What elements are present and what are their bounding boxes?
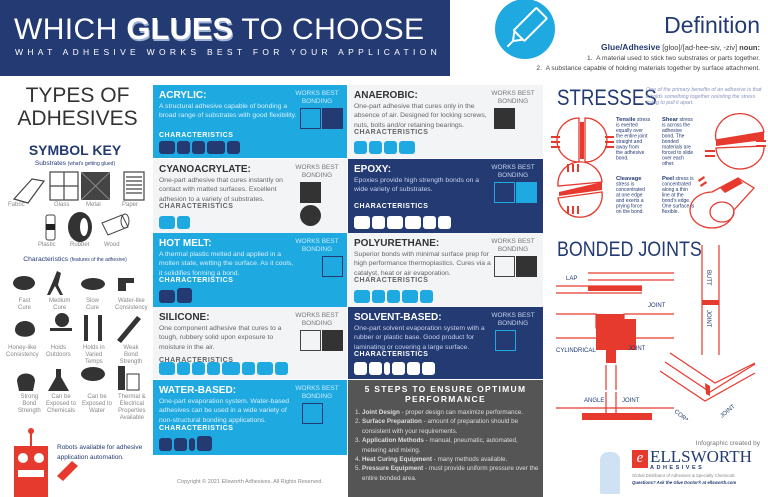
joint diagrams: JOINT	[622, 398, 640, 404]
characteristic icons grid: Honey-like	[8, 345, 37, 351]
logo: ellsworth	[632, 450, 648, 468]
heading: types of adhesives: ADHESIVES	[17, 107, 138, 130]
card: solvent-based: WORKS BEST BONDING	[491, 312, 535, 327]
substrate icons: Rubber	[70, 242, 90, 248]
card: polyurethane	[348, 233, 543, 307]
definition block: Glue/Adhesive [gloo]/[ad-hee-siv, -ziv] noun:	[601, 42, 760, 52]
stress diagrams: away from	[616, 144, 639, 150]
robot caption: Robots available for adhesive	[57, 444, 142, 451]
stress diagrams: One surface is	[662, 204, 695, 210]
card: hot melt: HOT MELT:	[159, 238, 212, 249]
card: epoxy: Epoxies provide high strength bonds on a wide variety of substrates.	[354, 177, 479, 193]
stress diagrams: bonded	[662, 139, 679, 145]
joint diagrams: CYLINDRICAL	[556, 348, 596, 354]
stress diagrams: equally over	[616, 128, 643, 134]
characteristic icons grid: Varied	[85, 352, 102, 358]
credit: infographic created by: Infographic created by	[696, 440, 760, 447]
credit: infographic created by	[600, 440, 760, 494]
characteristic icons grid: Thermal &	[118, 394, 146, 400]
characteristic icons grid: Cure	[86, 305, 99, 311]
card: silicone: WORKS BEST BONDING	[295, 312, 339, 327]
definition block	[536, 12, 760, 72]
stress diagrams: Shear stress	[662, 117, 693, 123]
joint diagrams: BUTT	[705, 270, 711, 286]
stress diagrams: prying force	[616, 204, 642, 210]
characteristic icons grid: Consistency	[6, 352, 39, 358]
stress diagrams: Tensile stress	[616, 117, 651, 123]
substrate icons: Glass	[54, 202, 69, 208]
card: water-based: WATER-BASED:	[159, 385, 236, 396]
stress diagrams	[551, 113, 766, 229]
panel: 5 steps	[348, 380, 543, 497]
stress diagrams: the entire joint	[616, 134, 648, 140]
characteristic icons grid: Cure	[18, 305, 31, 311]
card: anaerobic: ANAEROBIC:	[354, 90, 418, 101]
card: polyurethane: POLYURETHANE:	[354, 238, 439, 249]
heading: symbol key: SYMBOL KEY	[29, 142, 121, 158]
credit: infographic created by: ELLSWORTH	[650, 447, 752, 466]
joint diagrams: JOINT	[648, 303, 666, 309]
characteristic icons grid: Exposed to	[46, 401, 76, 407]
card: polyurethane: WORKS BEST BONDING	[491, 238, 535, 253]
substrate icons: Wood	[104, 242, 120, 248]
characteristic icons grid: Cure	[53, 305, 66, 311]
card: acrylic: A structural adhesive capable of bonding a broad range of substrates with good flexibility.	[159, 103, 296, 119]
card: cyanoacrylate: CYANOACRYLATE:	[159, 164, 251, 175]
characteristic icons grid: Fast	[19, 298, 30, 304]
heading: bonded joints: BONDED JOINTS	[557, 238, 702, 261]
characteristics label: Characteristics (features of the adhesive)	[23, 256, 127, 263]
card: hot melt: CHARACTERISTICS	[159, 277, 233, 284]
substrate icons: Metal	[86, 202, 101, 208]
characteristic icons grid: Outdoors	[46, 352, 71, 358]
characteristic icons grid: Slow	[86, 298, 99, 304]
card: epoxy: WORKS BEST BONDING	[491, 164, 535, 179]
characteristic icons grid: Consistency	[115, 305, 148, 311]
card: epoxy: CHARACTERISTICS	[354, 203, 428, 210]
stress diagrams: flexible.	[662, 209, 679, 215]
card: hot melt	[153, 233, 347, 307]
panel: 5 steps: Joint Design - proper design can maximize performance.	[362, 409, 523, 416]
card: epoxy: EPOXY:	[354, 164, 391, 175]
subtitle: WHAT ADHESIVE WORKS BEST FOR YOUR APPLICATION	[15, 47, 441, 57]
definition block: 1. A material used to stick two substrates or parts together.	[587, 55, 760, 62]
characteristic icons grid: Strength	[120, 359, 142, 365]
card: polyurethane: Superior bonds with minimal surface prep for high performance thermoplastics. Cures via a catalyst, heat or air evaporation.	[354, 251, 491, 277]
stress diagrams: at one edge	[616, 192, 643, 198]
joint diagrams: LAP	[566, 276, 577, 282]
stress diagrams: concentrated	[616, 187, 645, 193]
card: cyanoacrylate: One-part adhesive that cures instantly on contact with matted surfaces. Excellent adhesion to a variety of substrates.	[159, 177, 283, 203]
stress diagrams: adhesive	[662, 128, 682, 134]
stresses intro: One of the primary benefits of an adhesive is that it holds something together resisting the stress trying to pull it apart.	[646, 87, 761, 106]
substrate icons: Fabric	[8, 202, 25, 208]
card: hot melt: A thermal plastic melted and applied in a molten state, wetting the surface. As it cools, it solidifies forming a bond.	[159, 251, 293, 277]
characteristic icons grid: Holds	[51, 345, 66, 351]
title: WHICH GLUES TO CHOOSE	[14, 11, 424, 46]
stress diagrams: bond. The	[662, 134, 685, 140]
card: solvent-based	[348, 307, 543, 379]
stress diagrams: line at the	[662, 192, 684, 198]
stress diagrams: over each	[662, 156, 684, 162]
card: anaerobic: WORKS BEST BONDING	[491, 90, 535, 105]
panel: 5 steps: PERFORMANCE	[405, 394, 486, 404]
substrate icons	[8, 171, 145, 248]
card: cyanoacrylate: WORKS BEST BONDING	[295, 164, 339, 179]
heading: types of adhesives: TYPES OF	[26, 84, 129, 107]
joint diagrams: ANGLE	[584, 398, 604, 404]
card: water-based: WORKS BEST BONDING	[295, 385, 339, 400]
characteristic icons grid: Can be	[51, 394, 71, 400]
definition block: 2. A substance capable of holding materials together by surface attachment.	[536, 65, 760, 72]
characteristic icons grid: Weak Bond	[123, 345, 139, 358]
characteristic icons grid: Temps	[85, 359, 103, 365]
card: anaerobic	[348, 85, 543, 158]
characteristic icons grid: Properties	[118, 408, 146, 414]
characteristic icons grid: Water	[89, 408, 105, 414]
definition block: Definition	[664, 12, 760, 38]
icon: glue doctor	[600, 452, 620, 494]
credit: infographic created by: Questions? Ask the Glue Doctor® at ellsworth.com	[632, 480, 736, 485]
stress diagrams: Cleavage	[616, 176, 642, 182]
joint diagrams: JOINT	[628, 346, 646, 352]
robot caption: application automation.	[57, 454, 124, 461]
icon: robot	[14, 428, 78, 497]
characteristic icons grid: Strong	[20, 394, 38, 400]
substrate icons: Plastic	[38, 242, 56, 248]
header banner	[0, 0, 450, 76]
card: silicone: One component adhesive that cures to a tough, rubbery solid upon exposure to moisture in the air.	[159, 325, 281, 351]
panel: 5 steps: Surface Preparation - amount of preparation should be consistent with your requirements.	[362, 418, 518, 435]
stress diagrams: the adhesive	[616, 150, 645, 156]
card: anaerobic: One-part adhesive that cures only in the absence of air. Designed for locking screws, nuts, bolts and/or retaining bearings.	[354, 103, 487, 129]
heading: stresses: STRESSES	[557, 85, 657, 110]
characteristic icons grid: Can be	[87, 394, 107, 400]
stress diagrams: forced to slide	[662, 150, 693, 156]
panel: 5 steps: Pressure Equipment - must provide uniform pressure over the entire bonded area.	[362, 465, 538, 482]
characteristic icons grid: Water-like	[118, 298, 145, 304]
stress diagrams: is exerted	[616, 122, 638, 128]
characteristic icons grid: Exposed to	[82, 401, 112, 407]
card: cyanoacrylate: CHARACTERISTICS	[159, 203, 233, 210]
stress diagrams: stress is	[616, 182, 635, 188]
card: epoxy	[348, 159, 543, 233]
card: acrylic: WORKS BEST BONDING	[295, 90, 339, 105]
card: solvent-based: One-part solvent evaporation system with a rubber or plastic base. Good product for laminating or covering a large surface.	[354, 325, 485, 351]
copyright: Copyright © 2021 Ellsworth Adhesives. All Rights Reserved.	[177, 479, 323, 485]
credit: infographic created by: ADHESIVES	[650, 465, 704, 471]
credit: infographic created by: Global Distributor of Adhesives & Specialty Chemicals	[632, 473, 735, 478]
card: acrylic: ACRYLIC:	[159, 90, 206, 101]
card: solvent-based: CHARACTERISTICS	[354, 351, 428, 358]
card: water-based: One-part evaporation system. Water-based adhesives can be used in a wide variety of non-structural bonding applications.	[159, 398, 289, 424]
characteristic icons grid: Bond	[22, 401, 36, 407]
characteristic icons grid: Electrical	[120, 401, 144, 407]
card: hot melt: WORKS BEST BONDING	[295, 238, 339, 253]
stress diagrams: on the bond.	[616, 209, 644, 215]
card: cyanoacrylate	[153, 159, 347, 233]
card: silicone: SILICONE:	[159, 312, 210, 323]
card: water-based: CHARACTERISTICS	[159, 425, 233, 432]
stress diagrams: is across the	[662, 122, 690, 128]
stress diagrams: other.	[662, 161, 675, 167]
joint diagrams: JOINT	[705, 310, 711, 328]
substrates label: Substrates (what's getting glued)	[35, 160, 115, 167]
panel: 5 steps: 5 STEPS TO ENSURE OPTIMUM	[365, 384, 526, 394]
card: anaerobic: CHARACTERISTICS	[354, 129, 428, 136]
card: acrylic	[153, 85, 347, 158]
heading: types of adhesives	[17, 84, 138, 130]
card: acrylic: CHARACTERISTICS	[159, 132, 233, 139]
stress diagrams: bond.	[616, 156, 629, 162]
card: silicone: CHARACTERISTICS	[159, 357, 233, 364]
characteristic icons grid: Chemicals	[47, 408, 75, 414]
panel: 5 steps: Application Methods - manual, pneumatic, automated, metering and mixing.	[362, 437, 518, 454]
characteristic icons grid: Available	[120, 415, 144, 421]
icon: glue tube	[495, 0, 555, 59]
characteristic icons grid: Medium	[49, 298, 70, 304]
stress diagrams: along a thin	[662, 187, 688, 193]
card: polyurethane: CHARACTERISTICS	[354, 277, 428, 284]
substrate icons: Paper	[122, 202, 138, 208]
stress diagrams: materials are	[662, 144, 691, 150]
characteristic icons grid: Strength	[18, 408, 41, 414]
card: silicone	[153, 307, 347, 379]
stress diagrams: concentrated	[662, 182, 691, 188]
joint diagrams	[556, 245, 756, 420]
joint diagrams: JOINT	[719, 404, 737, 420]
logo: ellsworth: e	[637, 450, 643, 466]
characteristic icons grid: Holds in	[83, 345, 105, 351]
card: solvent-based: SOLVENT-BASED:	[354, 312, 442, 323]
stress diagrams: and exerts a	[616, 198, 644, 204]
card: water-based	[153, 380, 347, 455]
robot caption	[57, 444, 142, 461]
stress diagrams: straight and	[616, 139, 642, 145]
stress diagrams: Peel stress is	[662, 176, 694, 182]
stress diagrams: bond's edge.	[662, 198, 690, 204]
panel: 5 steps: Heat Curing Equipment - many methods available.	[362, 456, 507, 463]
characteristic icons grid	[6, 271, 148, 421]
